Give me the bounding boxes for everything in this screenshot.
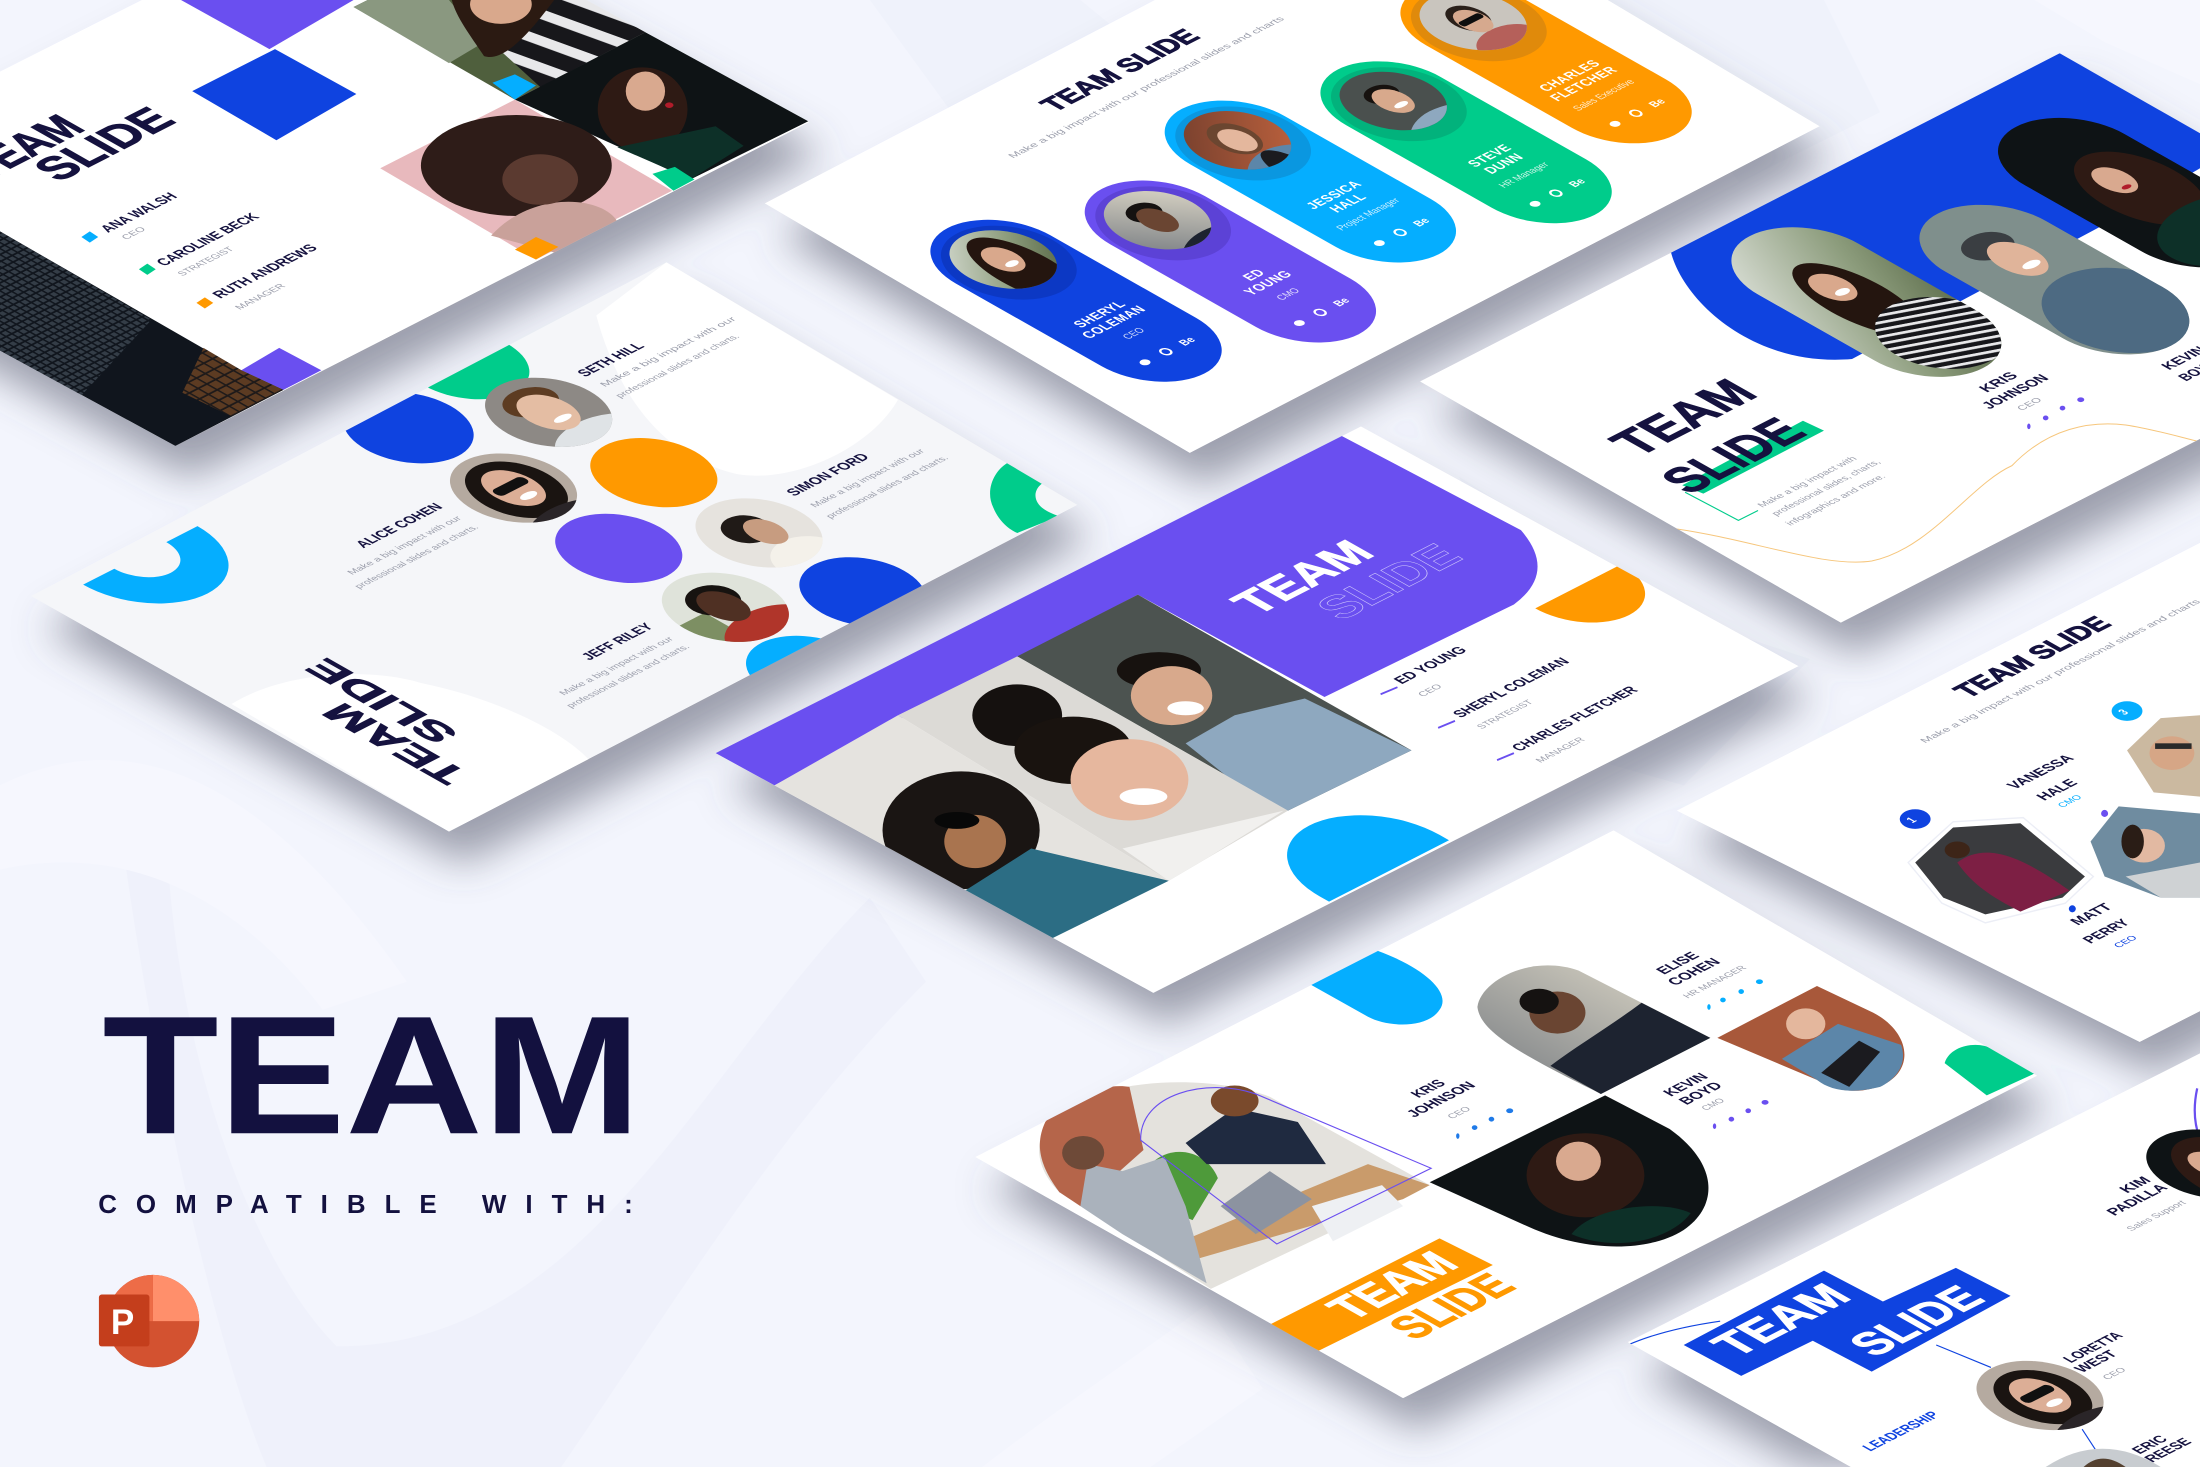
orange title banner: TEAM	[1316, 1245, 1470, 1327]
panel: slide with square grid and team list	[0, 0, 810, 446]
photo: man in blue shirt	[1017, 595, 1411, 811]
team list: CEO	[119, 225, 148, 241]
team member: Loretta West: CEO	[2100, 1366, 2129, 1381]
heading	[1005, 15, 1287, 160]
title with green highlight: TEAM	[1598, 372, 1770, 463]
heading	[1917, 597, 2200, 744]
team member: Vanessa Hale: VANESSA	[2002, 752, 2078, 791]
orange title banner: SLIDE	[1377, 1267, 1527, 1346]
team list: MANAGER	[232, 282, 288, 311]
orange circle	[590, 438, 718, 508]
team member: Kim Padilla: PADILLA	[2102, 1181, 2171, 1218]
team member: Loretta West: LORETTA	[2059, 1329, 2127, 1365]
team member: Kris Johnson: JOHNSON	[1977, 372, 2052, 411]
cyan half ring	[83, 526, 229, 604]
card: Sheryl Coleman: Be	[1176, 335, 1199, 348]
card: Jessica Hall: Be	[1411, 216, 1433, 228]
hexagon photo: man with glasses	[2127, 715, 2200, 797]
icon: PowerPoint logo: P	[111, 1303, 134, 1342]
card: Sheryl Coleman: COLEMAN	[1078, 303, 1149, 341]
purple banner	[716, 431, 1538, 785]
card: Sheryl Coleman: CEO	[1120, 326, 1148, 341]
team member: Kim Padilla: KIM	[2115, 1174, 2155, 1195]
photo: man with cap	[1888, 184, 2200, 372]
team member: Elise Cohen: COHEN	[1663, 955, 1724, 988]
thin purple outline	[1141, 1088, 1431, 1244]
orange title banner	[1268, 1238, 1527, 1351]
card: Steve Dunn: DUNN	[1480, 151, 1527, 176]
team member: Vanessa Hale: HALE	[2032, 776, 2081, 802]
team member: Kevin Boyd	[2157, 344, 2200, 383]
rotated title	[304, 658, 460, 786]
badge 3: 3	[2116, 708, 2132, 717]
cyan petal	[1310, 951, 1443, 1024]
blue shape	[1671, 52, 2200, 360]
photo: dark-haired woman	[1966, 91, 2200, 287]
photo: Eric Reese	[2046, 1449, 2161, 1467]
hexagon photo: man in magenta	[1908, 818, 2093, 923]
card: Charles Fletcher	[1371, 0, 1722, 159]
team member: Alice Cohen: Make a big impact with our	[345, 514, 464, 576]
title: SLIDE	[22, 101, 187, 188]
card: Ed Young: ED	[1239, 267, 1269, 283]
team member: Alice Cohen: professional slides and charts.	[352, 523, 481, 590]
photo: dark-haired woman	[515, 32, 810, 180]
panel: bottom-right slide with org chart	[1625, 1053, 2200, 1467]
team member: Loretta West	[2059, 1329, 2129, 1381]
team member: Elise Cohen: HR MANAGER	[1680, 964, 1749, 1000]
team list	[81, 190, 321, 311]
team member: Eric Reese: REESE	[2140, 1435, 2195, 1464]
team member: Kim Padilla	[2102, 1174, 2189, 1232]
heading: TEAM SLIDE	[1034, 26, 1207, 115]
orange title banner: SLIDE	[1377, 1267, 1527, 1346]
team list: MANAGER	[1533, 735, 1588, 764]
photo: dark-haired woman	[1430, 1095, 1708, 1246]
panel: centre slide with purple header	[716, 426, 1799, 993]
photo: woman on pink	[380, 100, 672, 259]
team member: Eric Reese	[2127, 1433, 2195, 1464]
photo: smiling woman	[898, 656, 1288, 881]
photo: Jeff Riley	[662, 572, 789, 642]
card: Jessica Hall	[1135, 85, 1486, 278]
photo: Kim Padilla	[2120, 1104, 2200, 1261]
team member: Jeff Riley	[556, 620, 692, 709]
blue cut circle	[346, 394, 474, 464]
badge 1	[1900, 809, 1931, 829]
photo: skyscraper	[0, 231, 283, 446]
panel: slide with blue header and pill photos	[1420, 52, 2200, 623]
purple corner square	[181, 0, 354, 49]
title: TEAM	[1220, 534, 1386, 621]
green half circle	[428, 344, 530, 400]
icon: PowerPoint logo	[99, 1275, 199, 1367]
card: Ed Young: CMO	[1274, 287, 1303, 302]
team list: RUTH ANDREWS	[208, 242, 321, 300]
card: Sheryl Coleman: SHERYL	[1070, 298, 1129, 330]
team member: Elise Cohen: ELISE	[1652, 949, 1703, 976]
team list: STRATEGIST	[1474, 698, 1536, 730]
team member: Jeff Riley: professional slides and charts.	[563, 643, 692, 709]
team member: Vanessa Hale: CMO	[2055, 793, 2084, 809]
rotated title: SLIDE	[296, 653, 467, 749]
green half ring	[990, 461, 1059, 533]
badge 1: 1	[1904, 816, 1920, 825]
badge 3	[2112, 701, 2142, 721]
team list: ANA WALSH	[96, 190, 181, 234]
team list: ED YOUNG	[1389, 644, 1470, 686]
photo: Loretta West	[1950, 1347, 2164, 1464]
photo: laughing woman	[1700, 208, 2038, 394]
team member: Kris Johnson: CEO	[1445, 1105, 1473, 1120]
panel: lower slide with petal photos	[975, 830, 2037, 1398]
heading: Make a big impact with our professional slides and charts	[1005, 15, 1287, 160]
team list: CAROLINE BECK	[152, 210, 263, 268]
team member: Kris Johnson: KRIS	[1406, 1077, 1449, 1100]
orange half circle	[1535, 564, 1672, 637]
card: Steve Dunn	[1291, 40, 1651, 239]
blue diamond	[192, 49, 356, 140]
team list: CHARLES FLETCHER	[1507, 684, 1642, 753]
photo: Seth Hill	[485, 378, 612, 447]
green petal	[1945, 1045, 2036, 1095]
card: Charles Fletcher: CHARLES	[1535, 58, 1604, 94]
team member: Seth Hill: Make a big impact with our	[597, 315, 739, 388]
team member: Simon Ford: SIMON FORD	[782, 451, 873, 498]
team member: Kris Johnson: JOHNSON	[1402, 1079, 1479, 1119]
card: Sheryl Coleman	[930, 220, 1222, 382]
team list: SHERYL COLEMAN	[1448, 655, 1573, 720]
accent squares	[241, 74, 695, 390]
photo: Alice Cohen	[450, 454, 578, 523]
title with green highlight: SLIDE	[1649, 411, 1819, 501]
team member: Elise Cohen	[1652, 949, 1763, 1010]
purple circle	[555, 514, 682, 583]
blue title blocks	[1684, 1268, 2011, 1376]
rotated title: TEAM	[312, 698, 477, 789]
panel: slide with circles	[31, 262, 1078, 832]
title	[1220, 534, 1474, 627]
title: TEAM: TEAM	[102, 981, 641, 1169]
hexagon photo: woman on stairs	[2091, 806, 2200, 898]
heading: TEAM SLIDE	[1948, 613, 2118, 702]
team member: Alice Cohen	[345, 500, 481, 590]
title: SLIDE	[1304, 537, 1474, 627]
panel: right slide with hexagon photos	[1677, 543, 2200, 1042]
team member: Matt Perry: CEO	[2111, 934, 2140, 949]
team member: Matt Perry: MATT	[2066, 900, 2116, 927]
team member: Eric Reese: ERIC	[2127, 1433, 2171, 1456]
photo: Simon Ford	[696, 498, 822, 568]
team member: Jeff Riley: Make a big impact with our	[556, 635, 676, 697]
team member: Alice Cohen: ALICE COHEN	[351, 500, 446, 550]
title with green highlight	[1598, 372, 1824, 520]
team member: Loretta West: WEST	[2070, 1347, 2121, 1375]
team member: Simon Ford: Make a big impact with our	[808, 447, 927, 509]
card: Steve Dunn: HR Manager	[1497, 160, 1553, 190]
card: Steve Dunn: Be	[1566, 177, 1589, 189]
team member: Jeff Riley: JEFF RILEY	[577, 620, 657, 662]
team member: Matt Perry	[2066, 900, 2140, 949]
card: Ed Young	[1084, 180, 1376, 342]
team member: Kevin Boyd	[1659, 1070, 1769, 1129]
orange curve	[1675, 424, 2200, 562]
team member: Matt Perry: PERRY	[2078, 916, 2134, 945]
white blobs	[232, 262, 898, 832]
description	[1755, 455, 1888, 527]
card: Charles Fletcher: FLETCHER	[1546, 64, 1621, 103]
team member: Seth Hill	[573, 315, 742, 399]
blue title blocks: TEAM	[1700, 1277, 1862, 1363]
heading: Make a big impact with our professional slides and charts	[1917, 597, 2200, 744]
card: Ed Young: Be	[1331, 296, 1353, 308]
team member: Kevin Boyd: CMO	[1699, 1097, 1727, 1112]
card: Ed Young: YOUNG	[1240, 268, 1296, 297]
blue circle	[799, 557, 922, 624]
team list: STRATEGIST	[175, 245, 237, 277]
panel: slide with coloured pill cards	[765, 0, 1820, 453]
photo: curly-haired person in sunglasses	[774, 715, 1169, 938]
card: Jessica Hall: Project Manager	[1334, 196, 1404, 233]
description: professional slides, charts,	[1769, 458, 1883, 517]
description: Make a big impact with	[1755, 455, 1859, 509]
cyan dome	[1249, 795, 1449, 902]
label: Leadership: LEADERSHIP	[1858, 1409, 1943, 1453]
card: Jessica Hall: HALL	[1326, 191, 1370, 215]
team list	[1381, 644, 1642, 764]
team list: CEO	[1415, 682, 1445, 698]
subtitle: compatible with: COMPATIBLE WITH:	[98, 1191, 633, 1219]
card: Charles Fletcher: Sales Executive	[1571, 78, 1638, 113]
team member: Vanessa Hale	[2002, 752, 2108, 817]
team member: Seth Hill: professional slides and charts.	[613, 333, 742, 399]
card: Charles Fletcher: Be	[1646, 97, 1669, 109]
cyan circle	[746, 636, 821, 676]
team member: Kevin Boyd: KEVIN	[1659, 1070, 1712, 1098]
card: Jessica Hall: JESSICA	[1302, 178, 1365, 211]
team member: Kris Johnson	[1402, 1077, 1513, 1139]
description: infographics and more.	[1783, 472, 1888, 527]
team member: Kris Johnson: CEO	[2014, 396, 2045, 412]
team member: Seth Hill: SETH HILL	[573, 339, 648, 379]
photo: young man	[1477, 965, 1710, 1094]
blue title blocks: SLIDE	[1838, 1279, 1996, 1363]
team member: Simon Ford: professional slides and charts.	[823, 454, 951, 520]
photo: woman in denim	[1717, 986, 1904, 1091]
team member: Simon Ford	[782, 447, 951, 520]
photo: team high five	[1039, 1082, 1430, 1289]
team member: Kris Johnson	[1974, 369, 2084, 429]
team member: Kevin Boyd: BOYD	[1674, 1079, 1726, 1107]
card: Steve Dunn: STEVE	[1464, 142, 1515, 169]
team member: Kris Johnson: KRIS	[1974, 369, 2022, 394]
photo: striped woman	[354, 0, 645, 100]
team member: Kim Padilla: Sales Support	[2124, 1199, 2189, 1232]
connector lines	[1625, 1088, 2200, 1453]
